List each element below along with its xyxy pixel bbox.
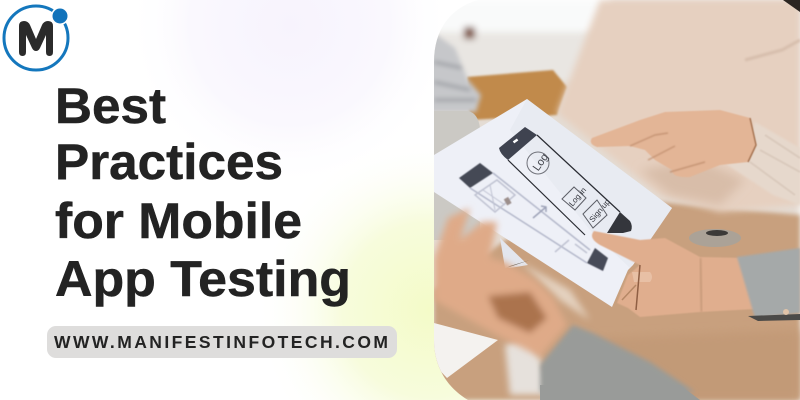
shirt cuff xyxy=(737,248,800,321)
website pill xyxy=(47,326,397,358)
table disc xyxy=(689,229,741,247)
title: Practices xyxy=(55,134,283,190)
table xyxy=(434,200,800,400)
title xyxy=(55,78,351,307)
room backdrop xyxy=(425,0,800,400)
grey sleeve xyxy=(540,325,695,392)
white paper lower left xyxy=(430,322,498,378)
sweater xyxy=(557,0,800,212)
chair xyxy=(467,70,567,120)
wireframe phone 1: Sign up xyxy=(588,197,612,224)
holding hand xyxy=(592,231,755,317)
website pill: WWW.MANIFESTINFOTECH.COM xyxy=(54,332,388,352)
title: for Mobile xyxy=(55,193,302,249)
wireframe phone 1 xyxy=(499,127,632,235)
sketch paper xyxy=(434,99,672,307)
wireframe phone 2 xyxy=(459,163,608,271)
knit sleeve xyxy=(728,124,800,202)
wireframe phone 1: Log xyxy=(531,151,551,173)
title: App Testing xyxy=(55,251,351,307)
pointing hand xyxy=(591,110,756,177)
wireframe phone 1: Log in xyxy=(567,186,588,208)
photo: hands holding wireframe sketches xyxy=(425,0,800,400)
grey object at left xyxy=(430,30,481,112)
title: Best xyxy=(55,78,166,134)
blurred open hand xyxy=(434,208,567,357)
logo xyxy=(4,6,69,70)
laptop xyxy=(430,111,480,240)
back sheet xyxy=(500,238,528,268)
